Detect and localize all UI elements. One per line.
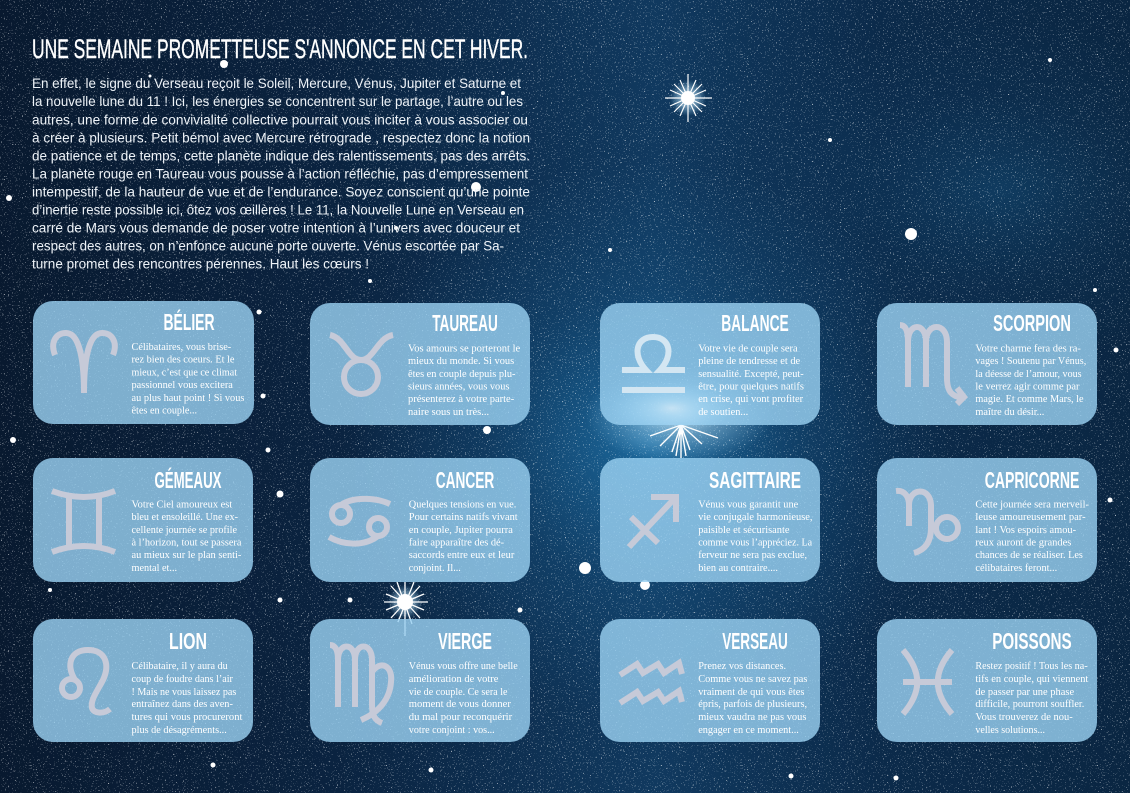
heading: Poissons: POISSONS [992,628,1072,654]
text: Lion: entraînez dans des aven- [132,699,233,710]
text: Lion: ! Mais ne vous laissez pas [132,687,236,698]
text: Cancer: faire apparaître des dé- [409,538,505,548]
text: Balance: sensualité. Excepté, peut- [698,369,804,380]
text: Poissons: de passer par une phase [975,687,1074,698]
text: Verseau: Comme vous ne savez pas [698,674,807,685]
text: Bélier: au plus haut point ! Si vous [132,393,244,404]
text: Cancer: Pour certains natifs vivant [409,512,518,523]
heading: Balance: BALANCE [721,310,789,336]
text: Cancer [409,500,518,574]
text: Lion: plus de désagréments... [132,725,227,736]
intro paragraph: à créer à plusieurs. Petit bémol avec Mercure rétrograde , respectez donc la notion [32,130,530,146]
text: Lion: tures qui vous procureront [132,712,242,723]
text: Vierge: vie de couple. Ce sera le [409,687,508,698]
text: Balance: Votre vie de couple sera [698,344,798,354]
icon: pisces [903,650,952,714]
text: Verseau: mieux vaudra ne pas vous [698,712,806,723]
card: Balance [600,303,820,434]
intro paragraph: intempestif, de la hauteur de vue et de l’endurance. Soyez conscient qu’une pointe [32,184,530,200]
intro paragraph: carré de Mars vous demande de poser votre intention à l’univers avec douceur et [32,220,520,236]
heading: Vierge: VIERGE [438,628,492,654]
text: Capricorne: Cette journée sera merveil- [975,500,1089,510]
intro paragraph: autres, une forme de convivialité collective pourrait vous inciter à vous associer ou [32,112,528,128]
starburst centre [585,367,775,463]
intro paragraph: En effet, le signe du Verseau reçoit le Soleil, Mercure, Vénus, Jupiter et Saturne et [32,76,521,91]
card: Gémeaux [33,458,253,582]
text: Balance: en crise, qui vont profiter [698,394,804,405]
text: Sagittaire: bien au contraire.... [698,563,778,574]
icon: gemini [52,491,115,552]
card: Verseau [600,619,820,742]
card: Vierge [310,619,530,742]
text: Gémeaux: bleu et ensoleillé. Une ex- [132,512,238,523]
text: Capricorne: lant ! Vos espoirs amou- [975,525,1077,536]
heading: Lion: LION [169,628,207,654]
text: Sagittaire [698,500,812,574]
text: Gémeaux: mental et... [132,563,177,574]
icon: scorpio [900,325,964,404]
text: Bélier: Célibataires, vous brise- [132,342,232,353]
card: Scorpion [877,303,1097,425]
text: Balance: de soutien... [698,407,748,418]
card: Sagittaire [600,458,820,582]
icon: libra [622,337,685,390]
text: Sagittaire: vie conjugale harmonieuse, [698,512,812,523]
text: Scorpion: le verrez agir comme par [975,382,1080,392]
starburst lower left [384,582,428,636]
text: Vierge: Vénus vous offre une belle [409,661,518,672]
text: Bélier: mieux, c’est que ce climat [132,368,237,378]
text: Verseau: vraiment de qui vous êtes [698,687,804,698]
text: Scorpion: magie. Et comme Mars, le [975,394,1084,405]
text: Verseau: Prenez vos distances. [698,661,786,672]
text: Taureau: êtes en couple depuis plu- [408,369,516,380]
card: Taureau [310,303,530,425]
text: Sagittaire: ferveur ne sera pas exclue, [698,550,807,561]
text: Verseau [698,661,807,736]
text: Bélier: rez bien des coeurs. Et le [132,354,235,366]
text: Taureau: Vos amours se porteront le [408,344,520,354]
text: Gémeaux [132,500,242,574]
text: Taureau: mieux du monde. Si vous [408,356,514,367]
icon: cancer [329,499,390,544]
text: Verseau: épris, parfois de plusieurs, [698,699,807,710]
text: Capricorne: reux auront de grandes [975,538,1071,548]
intro paragraph: respect des autres, on n’enfonce aucune porte ouverte. Vénus escortée par Sa- [32,238,504,254]
text: Sagittaire: paisible et sécurisante [698,525,790,536]
text: Balance: être, pour quelques natifs [698,382,804,392]
text: Poissons [975,661,1088,736]
icon: aquarius [620,663,682,703]
intro paragraph: de patience et de temps, cette planète indique des ralentissements, pas des arrêts. [32,148,530,164]
card: Capricorne [877,458,1097,582]
intro paragraph: turne promet des rencontres pérennes. Haut les cœurs ! [32,256,369,272]
text: Lion [132,661,242,736]
text: Vierge: moment de vous donner [409,699,511,710]
intro paragraph: d’inertie reste possible ici, ôtez vos œillères ! Le 11, la Nouvelle Lune en Verseau en [32,202,524,218]
text: Lion: coup de foudre dans l’air [132,674,233,685]
icon: aries [53,333,115,393]
text: Gémeaux: Votre Ciel amoureux est [132,500,232,510]
icon: virgo [330,645,391,723]
text: Scorpion: Votre charme fera des ra- [975,344,1081,354]
text: Cancer: Quelques tensions en vue. [409,500,516,510]
text: Poissons: difficile, pourront souffler. [975,699,1084,710]
heading: Taureau: TAUREAU [432,310,498,336]
text: Scorpion: la déesse de l’amour, vous [975,369,1082,380]
text: Scorpion: maître du désir... [975,407,1044,418]
text: Gémeaux: cellente journée se profile [132,525,237,536]
heading: Cancer: CANCER [436,467,494,493]
text: Capricorne: célibataires feront... [975,563,1057,574]
card: Lion [33,619,253,742]
text: Taureau: naire sous un très... [408,407,489,418]
text: Poissons: Vous trouverez de nou- [975,712,1073,723]
icon: leo [62,650,110,713]
text: Vierge [409,661,518,736]
text: Gémeaux: à l’horizon, tout se passera [132,538,242,548]
text: Poissons: tifs en couple, qui viennent [975,674,1088,685]
icon: capricorn [896,491,958,553]
heading: Scorpion: SCORPION [993,310,1071,336]
text: Balance [698,344,804,418]
text: Capricorne [975,500,1089,574]
glow: star behind card [610,382,734,434]
text: Vierge: amélioration de votre [409,674,499,685]
text: Poissons: velles solutions... [975,725,1045,736]
text: Cancer: conjoint. Il... [409,563,461,574]
text: Sagittaire: Vénus vous garantit une [698,500,798,510]
text: Scorpion [975,344,1086,418]
text: Balance: pleine de tendresse et de [698,356,800,367]
text: Taureau: sieurs années, vous vous [408,382,509,392]
heading: Bélier: BÉLIER [164,308,215,335]
intro paragraph: la nouvelle lune du 11 ! Ici, les énergies se concentrent sur le partage, l’autre ou les [32,94,523,109]
intro paragraph: La planète rouge en Taureau vous pousse à l’action réfléchie, pas d’empressement [32,166,528,182]
card: Poissons [877,619,1097,742]
text: Scorpion: vages ! Soutenu par Vénus, [975,356,1086,367]
text: Gémeaux: au mieux sur le plan senti- [132,550,242,561]
icon: taurus [330,335,393,394]
icon: sagittarius [629,497,676,547]
text: Verseau: engager en ce moment... [698,725,799,736]
text: Capricorne: chances de se réaliser. Les [975,550,1083,561]
starburst top [665,74,712,122]
heading: Sagittaire: SAGITTAIRE [709,467,801,493]
text: Poissons: Restez positif ! Tous les na- [975,661,1088,672]
title: UNE SEMAINE PROMETTEUSE S'ANNONCE EN CET HIVER. [32,34,528,64]
heading: Verseau: VERSEAU [722,628,788,654]
text: Bélier [132,342,244,416]
text: Capricorne: leuse amoureusement par- [975,512,1086,523]
heading: Gémeaux: GÉMEAUX [154,466,222,493]
text: Sagittaire: comme vous l’appréciez. La [698,538,812,548]
text: Taureau: présenterez à votre parte- [408,394,515,405]
intro paragraph [32,76,530,272]
text: Vierge: votre conjoint : vos... [409,725,495,736]
text: Taureau [408,344,520,418]
text: Bélier: passionnel vous excitera [132,380,233,391]
card: Bélier [33,301,254,424]
text: Cancer: en couple, Jupiter pourra [409,525,513,536]
text: Lion: Célibataire, il y aura du [132,661,228,672]
text: Cancer: saccords entre eux et leur [409,550,515,561]
text: Vierge: du mal pour reconquérir [409,712,513,723]
card: Cancer [310,458,530,582]
text: Bélier: êtes en couple... [132,406,197,416]
